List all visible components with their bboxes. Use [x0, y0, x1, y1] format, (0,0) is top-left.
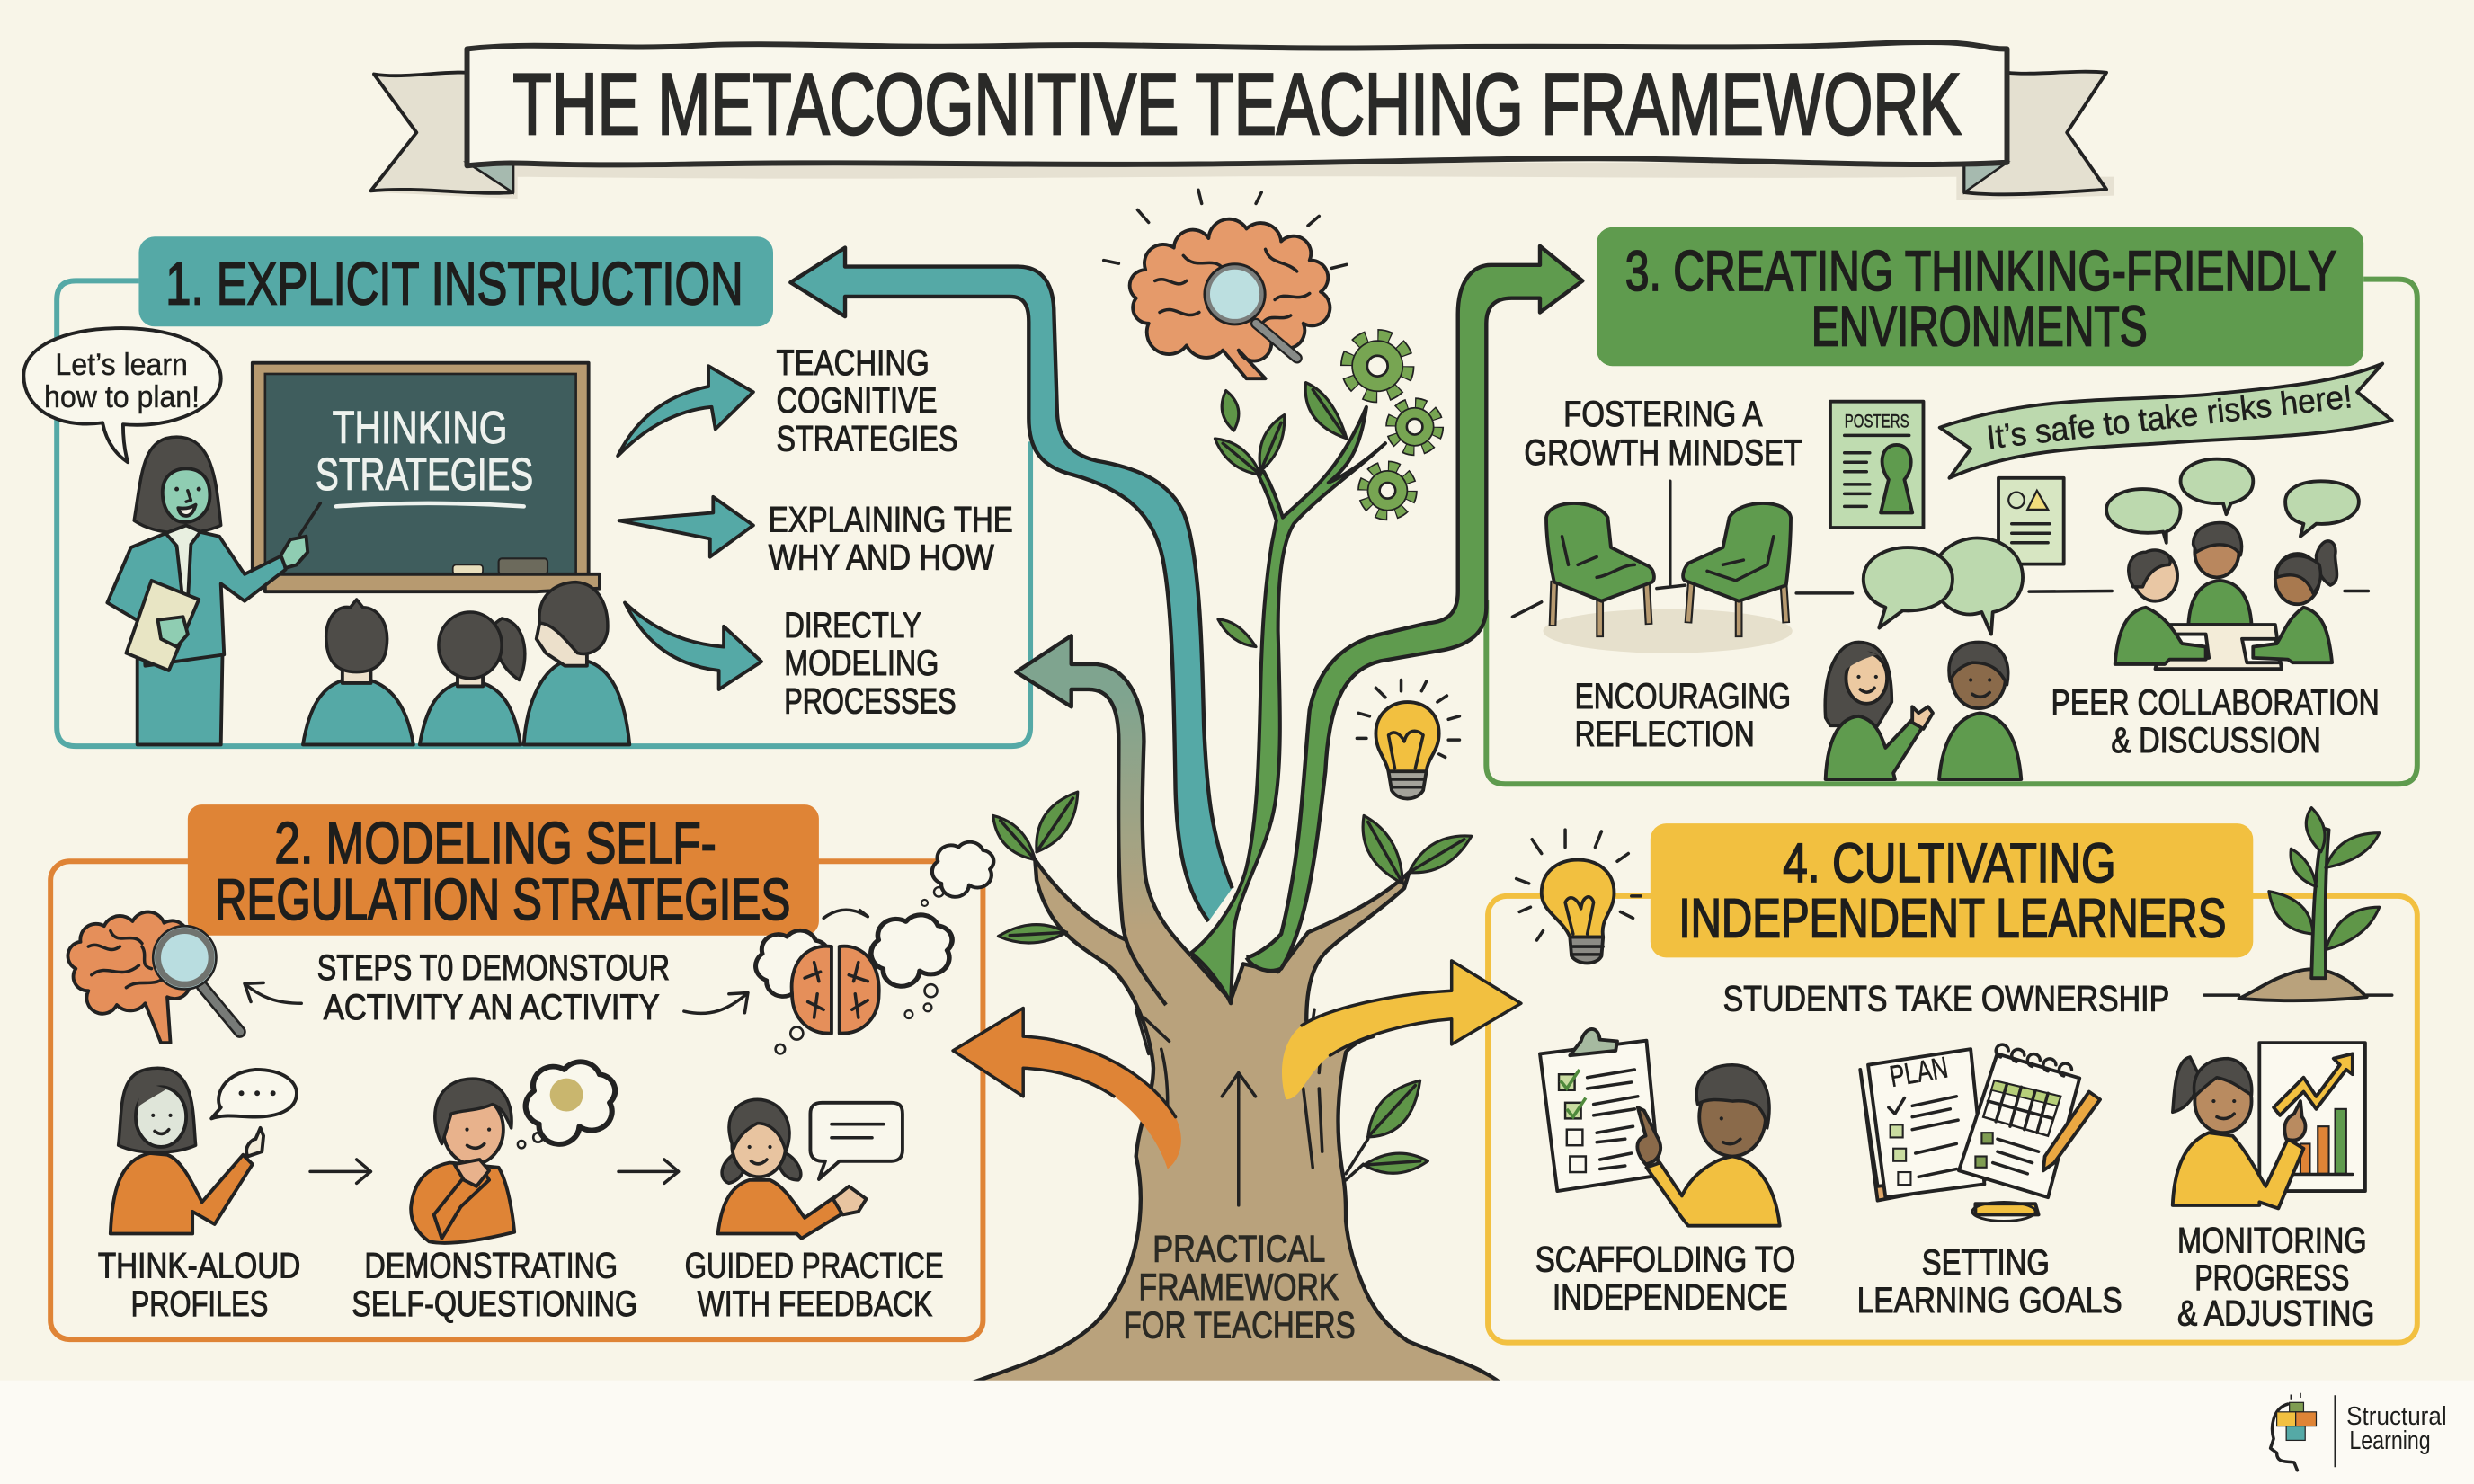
text: teaching cognitive strategies: STRATEGIES [777, 419, 957, 458]
heading: explicit instruction [138, 236, 773, 326]
heading: independent learners: INDEPENDENT LEARNERS [1678, 888, 2226, 950]
panel: 1 explicit instruction [23, 236, 1030, 746]
teacher figure [107, 437, 320, 744]
arrow: to directly modeling [625, 602, 761, 689]
speech bubble: let's learn [23, 328, 221, 462]
person: self-questioning [411, 1062, 615, 1243]
text: think-aloud profiles: PROFILES [131, 1284, 268, 1324]
panel: 2 modeling self-regulation strategies [50, 804, 993, 1339]
text: explaining the why and how: EXPLAINING THE [769, 500, 1013, 539]
logo: structural learning [2271, 1393, 2447, 1471]
person with clipboard [1540, 1029, 1780, 1226]
chairs [1512, 481, 2368, 653]
text: practical framework for teachers [1124, 1227, 1356, 1346]
heading: modeling self-regulation: REGULATION STRATEGIES [215, 866, 790, 932]
text: directly modeling processes [784, 606, 957, 721]
text: guided practice with feedback: GUIDED PRACTICE [685, 1247, 944, 1286]
text: directly modeling processes: PROCESSES [784, 681, 957, 721]
text: setting learning goals: SETTING [1922, 1243, 2050, 1283]
text: peer collaboration [2051, 683, 2380, 760]
person with progress chart [2173, 1043, 2365, 1208]
arrow: to teaching cognitive strategies [618, 366, 753, 456]
heading: thinking-friendly environments [1597, 227, 2363, 366]
speech bubble: ellipsis [211, 1070, 297, 1118]
panel: 4 cultivating independent learners [1488, 808, 2417, 1343]
person: think-aloud [111, 1068, 297, 1233]
students talking [1825, 642, 2021, 779]
text: fostering a growth mindset: FOSTERING A [1563, 395, 1763, 434]
arrow: trunk upward [1222, 1072, 1256, 1205]
text: monitoring progress: MONITORING [2177, 1222, 2367, 1261]
text: setting learning goals [1857, 1243, 2122, 1320]
arrow: gradient stem to panel 1 [1016, 635, 1191, 1005]
text: steps to demonstour [317, 948, 670, 1027]
central green stem [1191, 407, 1385, 1003]
text: encouraging reflection [1575, 677, 1791, 754]
text: think-aloud profiles: THINK-ALOUD [98, 1247, 300, 1286]
arrow: to brain [245, 982, 301, 1003]
thought cloud [518, 1062, 615, 1148]
text: think-aloud profiles [98, 1247, 300, 1324]
text: guided practice with feedback [685, 1247, 944, 1324]
small poster [1998, 478, 2064, 564]
heading: independent learners [1651, 823, 2253, 957]
icon: light bulb [1517, 830, 1641, 963]
poster [1830, 402, 1923, 528]
arrow: orange to self-regulation [953, 1009, 1181, 1169]
text: peer collaboration: PEER COLLABORATION [2051, 683, 2380, 723]
text: demonstrating self-questioning [352, 1247, 637, 1324]
footer strip [0, 1381, 2474, 1484]
text: students take ownership: STUDENTS TAKE OWNERSHIP [1723, 979, 2169, 1018]
icon: gears [1347, 335, 1438, 515]
icon: brain with magnifier [67, 912, 240, 1043]
logo: structural learning: Structural [2346, 1402, 2447, 1431]
text: teaching cognitive strategies: TEACHING [777, 343, 930, 383]
text: steps to demonstour: ACTIVITY AN ACTIVITY [324, 988, 660, 1027]
text: explaining the why and how [769, 500, 1013, 578]
text: peer collaboration: & DISCUSSION [2111, 721, 2321, 760]
text: guided practice with feedback: WITH FEEDBACK [698, 1284, 932, 1324]
banner: it's safe to take risks here [1940, 364, 2392, 478]
text: encouraging reflection: ENCOURAGING [1575, 677, 1791, 716]
text: fostering a growth mindset [1524, 395, 1802, 473]
text: scaffolding to independence: INDEPENDENCE [1553, 1278, 1788, 1318]
speech bubble: lines [810, 1103, 903, 1179]
text: practical framework for teachers: FOR TEACHERS [1124, 1303, 1356, 1346]
speech bubbles: reflection [1864, 538, 2023, 635]
text: demonstrating self-questioning: DEMONSTRATING [364, 1247, 618, 1286]
title banner [370, 42, 2114, 200]
panel: 3 creating thinking-friendly environments [1486, 227, 2417, 784]
logo: structural learning: Learning [2349, 1426, 2431, 1455]
arrow: yellow to independent learners [1282, 961, 1521, 1099]
icon: central light bulb [1357, 680, 1459, 799]
text: monitoring progress: PROGRESS [2194, 1258, 2349, 1298]
text: monitoring progress: & ADJUSTING [2177, 1293, 2374, 1333]
arrow: green branch to thinking environments [1247, 246, 1582, 971]
text: encouraging reflection: REFLECTION [1575, 715, 1755, 754]
arrow: teal branch to explicit instruction [790, 248, 1233, 921]
text: scaffolding to independence: SCAFFOLDING TO [1535, 1240, 1795, 1280]
student: left [303, 600, 414, 744]
speech bubble: let's learn: Let’s learn [55, 348, 188, 382]
chalkboard: THINKING [333, 402, 507, 453]
text: teaching cognitive strategies [777, 343, 957, 458]
icon: thinking brain with clouds [756, 842, 993, 1053]
text: practical framework for teachers: FRAMEWORK [1138, 1266, 1339, 1308]
person: guided practice [718, 1099, 903, 1239]
text: teaching cognitive strategies: COGNITIVE [777, 381, 938, 421]
group collaborating at table [2115, 523, 2337, 669]
arrow: to explaining the why [619, 497, 753, 557]
tree leaves [993, 383, 1472, 1180]
icon: brain and magnifier [1104, 190, 1347, 378]
chalkboard [253, 363, 600, 591]
text: practical framework for teachers: PRACTICAL [1152, 1227, 1325, 1269]
text: explaining the why and how: WHY AND HOW [769, 538, 994, 578]
text: scaffolding to independence [1535, 1240, 1795, 1318]
chalkboard: STRATEGIES [316, 449, 533, 500]
tree trunk [957, 860, 1507, 1388]
speech bubble: let's learn: how to plan! [44, 380, 200, 414]
text: demonstrating self-questioning: SELF-QUESTIONING [352, 1284, 637, 1324]
arrow: step one to two [310, 1160, 370, 1183]
heading: modeling self-regulation [188, 804, 819, 936]
text: directly modeling processes: DIRECTLY [784, 606, 921, 645]
icon: sprouting plant [2204, 808, 2392, 1000]
poster: POSTERS [1845, 412, 1909, 432]
text: setting learning goals: LEARNING GOALS [1857, 1281, 2122, 1320]
text: directly modeling processes: MODELING [784, 644, 939, 683]
icon: plan and calendar: PLAN [1887, 1051, 1951, 1094]
student: right [524, 582, 629, 744]
title text: THE METACOGNITIVE TEACHING FRAMEWORK [512, 57, 1962, 153]
text: monitoring progress [2177, 1222, 2374, 1333]
text: fostering a growth mindset: GROWTH MINDSET [1524, 433, 1802, 473]
speech bubbles: collaboration [2106, 459, 2359, 543]
icon: plan and calendar [1860, 1044, 2100, 1221]
heading: modeling self-regulation: 2. MODELING SELF- [274, 810, 716, 875]
student: middle [420, 612, 525, 744]
text: steps to demonstour: STEPS T0 DEMONSTOUR [317, 948, 670, 988]
heading: explicit instruction: 1. EXPLICIT INSTRUCTION [165, 252, 743, 318]
heading: independent learners: 4. CULTIVATING [1783, 832, 2116, 894]
heading: thinking-friendly environments: ENVIRONMENTS [1811, 295, 2148, 358]
banner: it's safe to take risks here: It’s safe to take risks here! [1985, 378, 2354, 456]
arrow: to thinking brain [684, 992, 748, 1013]
arrow: step two to three [618, 1160, 679, 1183]
